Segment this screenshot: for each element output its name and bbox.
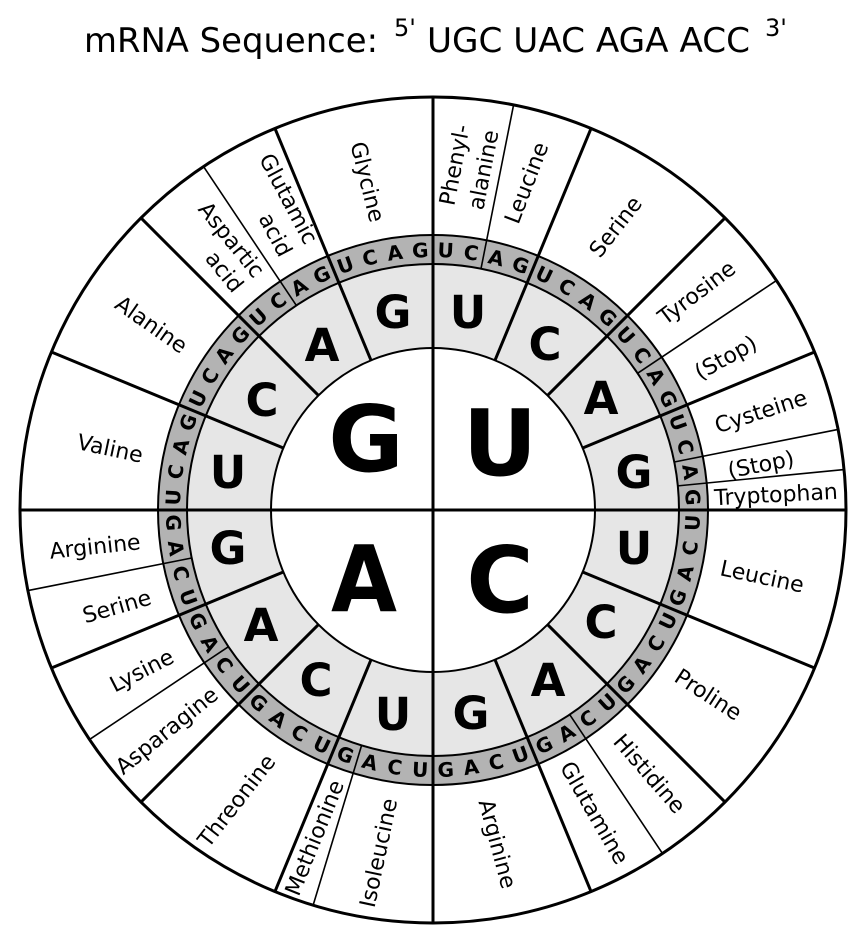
title: mRNA Sequence: <box>84 21 378 61</box>
second base letters: U <box>210 446 246 499</box>
second base letters: C <box>299 654 333 707</box>
second base letters: A <box>584 372 619 425</box>
label: serine UC: Serine <box>585 192 648 263</box>
third base letter ring: G <box>161 514 186 532</box>
second base letters: A <box>531 654 566 707</box>
third base letter ring: G <box>334 741 357 769</box>
third base letter ring: C <box>360 244 380 271</box>
third base letter ring: C <box>386 754 404 780</box>
third base letter ring: A <box>359 749 381 776</box>
label: leucine UU: Leucine <box>501 139 554 227</box>
third base letter ring: C <box>287 719 312 747</box>
third base letter ring: G <box>593 303 622 332</box>
third base letter ring: G <box>654 386 682 411</box>
third base letter ring: C <box>210 652 238 678</box>
third base letter ring: C <box>642 631 670 656</box>
label: stop UA: (Stop) <box>691 331 762 386</box>
second base letters: G <box>616 446 652 499</box>
label: aspartic acid: acid <box>200 247 248 298</box>
third base letter ring: U <box>226 671 255 699</box>
first base letters <box>328 386 537 634</box>
first base letters: U <box>463 390 537 497</box>
title: UGC UAC AGA ACC <box>427 21 750 61</box>
amino acid labels <box>48 123 838 910</box>
title <box>84 14 787 61</box>
third base letter ring: G <box>184 609 212 634</box>
label: proline: Proline <box>670 665 746 726</box>
third base letter ring: C <box>628 342 656 368</box>
label: valine: Valine <box>75 430 145 469</box>
label: alanine: Alanine <box>110 292 192 359</box>
third base letter ring: A <box>462 754 481 780</box>
label: glutamic acid: acid <box>253 209 296 261</box>
label: phenylalanine <box>435 123 504 212</box>
label: stop UGA: (Stop) <box>726 447 796 484</box>
third base letter ring: G <box>611 670 640 699</box>
third base letter ring: U <box>184 386 212 411</box>
second base letters: U <box>616 522 652 575</box>
third base letter ring: A <box>575 287 602 316</box>
third base letter ring: G <box>226 321 255 350</box>
third base letter ring: A <box>385 240 405 266</box>
third base letter ring: U <box>412 757 429 782</box>
second base letters <box>210 286 652 741</box>
third base letter ring: U <box>334 251 357 279</box>
third base letter ring: U <box>532 261 557 289</box>
third base letter ring: C <box>554 273 579 301</box>
second base letters: C <box>584 596 618 649</box>
label: glutamine: Glutamine <box>554 758 633 869</box>
label: methionine: Methionine <box>281 777 350 900</box>
label: cysteine: Cysteine <box>712 386 810 439</box>
second base letters: U <box>450 286 486 339</box>
third base letter ring: A <box>265 705 292 733</box>
second base letters: G <box>375 286 411 339</box>
label: histidine: Histidine <box>608 730 690 819</box>
third base letter ring: U <box>654 609 682 634</box>
second base letters: A <box>244 599 279 652</box>
second base letters: A <box>305 319 340 372</box>
third base letter ring: C <box>575 705 601 733</box>
label: aspartic acid: Aspartic <box>193 198 269 283</box>
label: arginine AG: Arginine <box>48 530 142 565</box>
third base letter ring: G <box>437 757 455 782</box>
third base letter ring: U <box>309 731 334 759</box>
third base letter ring: C <box>196 364 224 389</box>
label: lysine: Lysine <box>106 645 178 698</box>
third base letter ring: A <box>287 272 313 301</box>
third base letter ring: C <box>672 437 699 457</box>
third base letter ring: A <box>196 631 225 657</box>
third base letter ring: A <box>672 562 699 584</box>
third base letter ring: A <box>486 244 507 271</box>
first base letters: A <box>331 526 397 633</box>
third base letter ring: C <box>265 287 291 315</box>
label: glutamic acid: Glutamic <box>253 150 322 249</box>
second base letters: G <box>210 522 246 575</box>
third base letter ring: U <box>611 321 640 349</box>
third base letter ring: G <box>680 488 705 506</box>
label: tyrosine: Tyrosine <box>653 256 741 331</box>
third base letter ring: A <box>163 539 189 558</box>
third base letter ring: G <box>664 586 692 609</box>
third base letter ring: G <box>174 411 202 434</box>
first base letters: G <box>328 386 404 493</box>
label: phenylalanine: alanine <box>465 128 504 212</box>
first base letters: C <box>466 527 534 634</box>
third base letter ring: G <box>309 261 334 289</box>
label: glycine: Glycine <box>344 139 389 225</box>
label: serine AG: Serine <box>80 586 154 629</box>
label: isoleucine: Isoleucine <box>356 796 403 910</box>
third base letter ring: U <box>680 514 705 531</box>
third base letter ring: A <box>554 718 580 747</box>
third base letter ring: A <box>628 651 656 678</box>
third base letter ring: C <box>167 563 194 583</box>
third base letter ring: U <box>594 688 622 717</box>
second base letters: C <box>528 318 562 371</box>
third base letter ring: C <box>677 539 703 557</box>
third base letter ring: C <box>462 240 480 266</box>
third base letter ring: U <box>437 238 454 263</box>
label: leucine CU: Leucine <box>718 556 806 599</box>
label: arginine CG: Arginine <box>473 797 520 891</box>
third base letter ring: A <box>167 436 194 457</box>
label: tryptophan: Tryptophan <box>713 480 838 511</box>
third base letter ring: U <box>664 411 692 434</box>
third base letter ring: A <box>210 341 239 368</box>
second base letters: C <box>245 374 279 427</box>
third base letter ring: G <box>509 251 532 279</box>
label: phenylalanine: Phenyl- <box>435 123 476 208</box>
title: 5' <box>394 14 416 42</box>
third base letter ring: A <box>677 462 703 482</box>
third base letter ring: U <box>174 586 202 609</box>
label: threonine: Threonine <box>193 750 281 853</box>
label: asparagine: Asparagine <box>111 683 223 780</box>
third base letter ring <box>161 238 705 782</box>
third base letter ring: C <box>163 463 189 481</box>
third base letter ring: U <box>244 303 272 332</box>
third base letter ring: U <box>161 489 186 506</box>
title: 3' <box>765 14 787 42</box>
second base letters: G <box>453 687 489 740</box>
second base letters: U <box>375 688 411 741</box>
third base letter ring: G <box>244 688 273 717</box>
third base letter ring: G <box>532 731 557 759</box>
third base letter ring: A <box>642 364 671 390</box>
third base letter ring: U <box>509 741 532 769</box>
third base letter ring: C <box>486 749 506 776</box>
third base letter ring: G <box>411 238 429 263</box>
